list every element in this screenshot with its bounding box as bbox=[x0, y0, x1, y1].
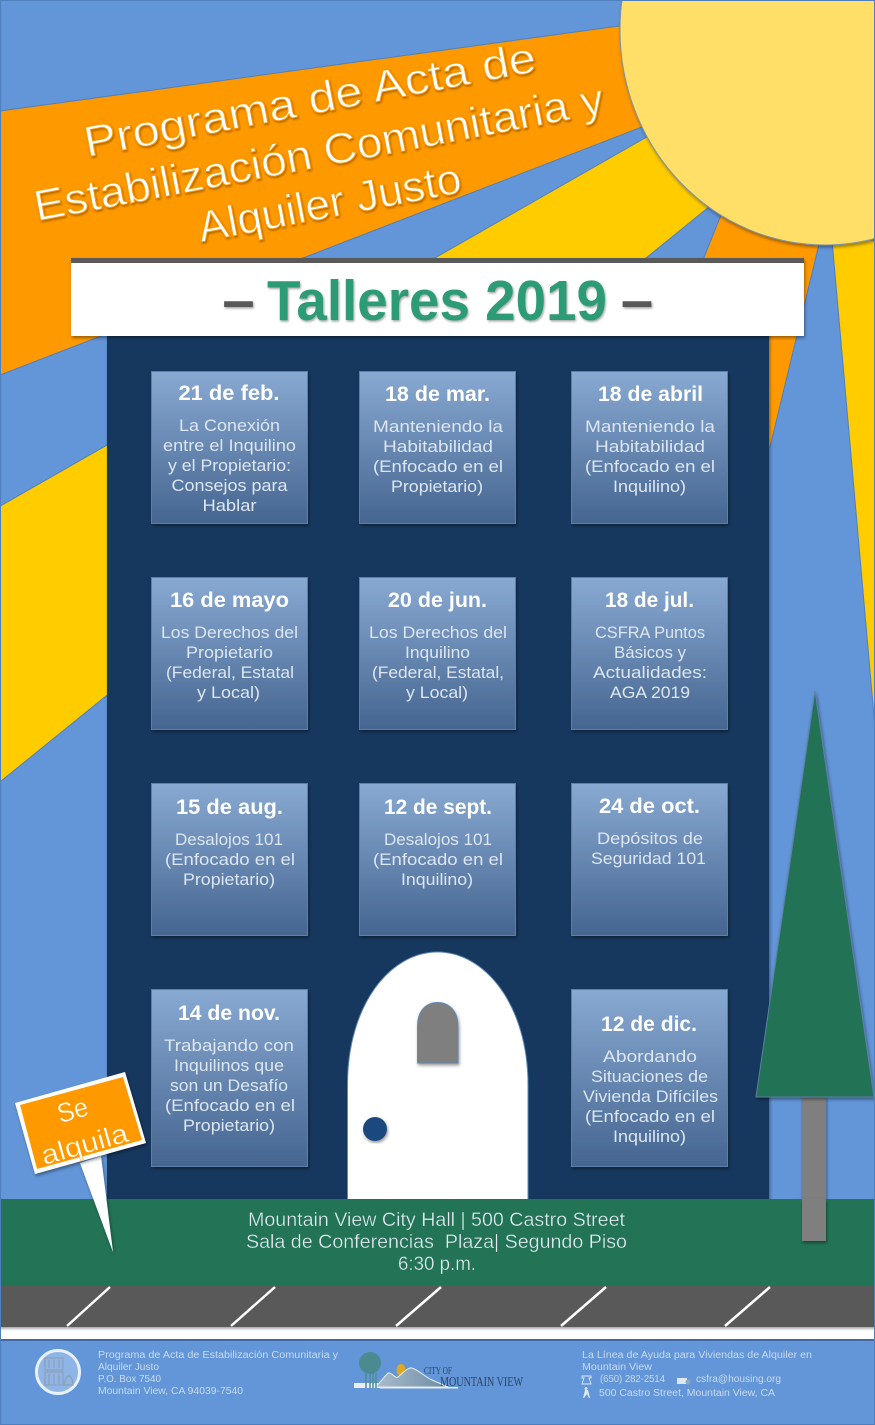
card: 15 de aug. bbox=[152, 784, 308, 936]
card: 15 de aug.: Desalojos 101 bbox=[175, 830, 283, 849]
card: 16 de mayo: (Federal, Estatal bbox=[166, 663, 294, 682]
footer left text: Alquiler Justo bbox=[98, 1362, 159, 1373]
card: 12 de dic.: Vivienda Difíciles bbox=[583, 1087, 718, 1106]
card: 15 de aug.: Propietario) bbox=[183, 870, 275, 889]
sign stake bbox=[80, 1156, 113, 1252]
door knob bbox=[363, 1117, 387, 1141]
card: 18 de jul. bbox=[572, 578, 728, 730]
card: 14 de nov.: Trabajando con bbox=[164, 1036, 294, 1055]
card: 24 de oct.: 24 de oct. bbox=[599, 795, 700, 818]
sign text: Se bbox=[54, 1092, 92, 1129]
icon: telephone bbox=[582, 1376, 591, 1384]
footer right text: 500 Castro Street, Mountain View, CA bbox=[599, 1388, 775, 1399]
card: 18 de mar. bbox=[360, 372, 516, 524]
card: 18 de mar.: Habitabilidad bbox=[383, 437, 493, 456]
footer band bbox=[0, 1339, 875, 1425]
heading text: – bbox=[621, 268, 653, 333]
card: 12 de sept.: Inquilino) bbox=[401, 870, 473, 889]
address text bbox=[246, 1210, 627, 1275]
card: 20 de jun.: Inquilino bbox=[405, 643, 470, 662]
logo: City of Mountain View: CITY OF bbox=[424, 1365, 452, 1377]
card: 18 de abril: Habitabilidad bbox=[595, 437, 705, 456]
card: 12 de dic.: (Enfocado en el bbox=[585, 1107, 715, 1126]
card: 21 de feb.: 21 de feb. bbox=[178, 382, 280, 405]
card: 21 de feb.: Hablar bbox=[202, 496, 257, 515]
heading text: Talleres 2019 bbox=[267, 269, 607, 333]
card: 21 de feb.: y el Propietario: bbox=[168, 456, 291, 475]
card: 15 de aug.: 15 de aug. bbox=[176, 796, 283, 819]
card: 18 de mar.: 18 de mar. bbox=[385, 383, 490, 406]
card: 18 de jul.: 18 de jul. bbox=[605, 589, 694, 612]
card: 21 de feb. bbox=[152, 372, 308, 524]
card: 24 de oct.: Depósitos de bbox=[597, 829, 703, 848]
title: Programa de Acta de bbox=[80, 34, 540, 167]
footer left text bbox=[98, 1350, 338, 1397]
card: 12 de sept.: Desalojos 101 bbox=[384, 830, 492, 849]
card: 12 de sept. bbox=[360, 784, 516, 936]
card: 18 de abril: (Enfocado en el bbox=[585, 457, 715, 476]
card: 14 de nov.: 14 de nov. bbox=[178, 1002, 280, 1025]
card: 14 de nov. bbox=[152, 990, 308, 1166]
road bbox=[0, 1286, 875, 1327]
footer right text: La Línea de Ayuda para Viviendas de Alquiler en bbox=[582, 1350, 812, 1361]
card: 21 de feb.: entre el Inquilino bbox=[163, 436, 296, 455]
card: 18 de mar.: (Enfocado en el bbox=[373, 457, 503, 476]
footer right text: Mountain View bbox=[582, 1362, 653, 1373]
card: 16 de mayo: y Local) bbox=[197, 683, 260, 702]
card: 24 de oct. bbox=[572, 784, 728, 936]
heading text: – bbox=[222, 268, 255, 333]
card: 12 de dic.: Abordando bbox=[603, 1047, 697, 1066]
card: 21 de feb.: Consejos para bbox=[172, 476, 288, 495]
card: 18 de jul.: Actualidades: bbox=[593, 663, 707, 682]
footer right text: csfra@housing.org bbox=[696, 1374, 781, 1385]
card: 14 de nov.: Propietario) bbox=[183, 1116, 275, 1135]
sign text bbox=[38, 1092, 133, 1171]
building bbox=[107, 330, 769, 1205]
card: 20 de jun.: 20 de jun. bbox=[388, 589, 487, 612]
door bbox=[348, 952, 528, 1200]
card: 18 de abril: Inquilino) bbox=[613, 477, 686, 496]
logo: City of Mountain View: MOUNTAIN VIEW bbox=[440, 1375, 524, 1390]
for rent sign bbox=[15, 1072, 146, 1252]
title: Alquiler Justo bbox=[194, 155, 465, 252]
logo: City of Mountain View bbox=[354, 1352, 524, 1390]
sign text: alquila bbox=[38, 1118, 133, 1171]
card: 12 de sept.: 12 de sept. bbox=[384, 796, 492, 819]
sun bbox=[620, 0, 875, 245]
card: 15 de aug.: (Enfocado en el bbox=[165, 850, 295, 869]
card: 14 de nov.: Inquilinos que bbox=[174, 1056, 284, 1075]
title: Estabilización Comunitaria y bbox=[30, 75, 608, 231]
ground with address bbox=[0, 1199, 875, 1286]
card: 18 de jul.: AGA 2019 bbox=[610, 683, 690, 702]
card: 18 de jul.: CSFRA Puntos bbox=[595, 623, 705, 642]
footer right text bbox=[582, 1350, 812, 1399]
heading banner bbox=[71, 258, 804, 336]
sun rays bbox=[0, 24, 875, 786]
card: 20 de jun.: y Local) bbox=[406, 683, 468, 702]
card: 12 de sept.: (Enfocado en el bbox=[373, 850, 503, 869]
footer right text: (650) 282-2514 bbox=[600, 1374, 665, 1385]
icon: seal bbox=[36, 1350, 80, 1394]
icon: mail bbox=[677, 1378, 690, 1384]
card: 12 de dic.: 12 de dic. bbox=[601, 1013, 697, 1036]
tree bbox=[756, 691, 874, 1097]
card: 18 de abril: 18 de abril bbox=[598, 383, 703, 406]
card: 16 de mayo: Propietario bbox=[186, 643, 273, 662]
card: 24 de oct.: Seguridad 101 bbox=[591, 849, 706, 868]
card: 18 de jul.: Básicos y bbox=[614, 643, 686, 662]
tree trunk over ground bbox=[802, 1199, 826, 1241]
footer left text: Mountain View, CA 94039-7540 bbox=[98, 1386, 243, 1397]
card: 20 de jun. bbox=[360, 578, 516, 730]
tree trunk bbox=[802, 1097, 826, 1241]
footer left text: P.O. Box 7540 bbox=[98, 1374, 161, 1385]
card: 14 de nov.: son un Desafío bbox=[170, 1076, 288, 1095]
card: 16 de mayo bbox=[152, 578, 308, 730]
address text: Mountain View City Hall | 500 Castro Street bbox=[248, 1210, 626, 1231]
address text: 6:30 p.m. bbox=[398, 1254, 476, 1275]
door window bbox=[418, 1002, 458, 1063]
card: 20 de jun.: (Federal, Estatal, bbox=[372, 663, 504, 682]
card: 12 de dic. bbox=[572, 990, 728, 1166]
footer left text: Programa de Acta de Estabilización Comunitaria y bbox=[98, 1350, 338, 1361]
card: 18 de mar.: Manteniendo la bbox=[373, 417, 504, 436]
icon: pedestrian bbox=[583, 1387, 590, 1398]
title bbox=[30, 34, 608, 252]
card: 20 de jun.: Los Derechos del bbox=[369, 623, 507, 642]
card: 16 de mayo: 16 de mayo bbox=[170, 589, 289, 612]
card: 21 de feb.: La Conexión bbox=[179, 416, 280, 435]
address text: Sala de Conferencias Plaza| Segundo Piso bbox=[246, 1232, 627, 1253]
card: 18 de abril: Manteniendo la bbox=[585, 417, 716, 436]
card: 14 de nov.: (Enfocado en el bbox=[165, 1096, 295, 1115]
sidewalk bbox=[0, 1327, 875, 1339]
card: 18 de abril bbox=[572, 372, 728, 524]
card: 12 de dic.: Situaciones de bbox=[591, 1067, 708, 1086]
card: 18 de mar.: Propietario) bbox=[391, 477, 483, 496]
card: 12 de dic.: Inquilino) bbox=[613, 1127, 686, 1146]
card: 16 de mayo: Los Derechos del bbox=[161, 623, 298, 642]
